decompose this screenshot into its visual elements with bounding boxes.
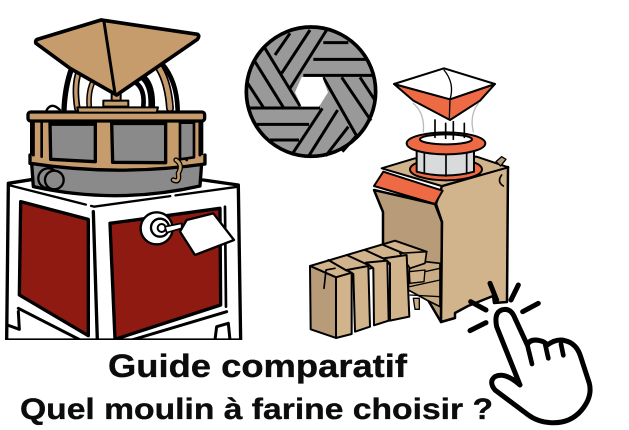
top rim — [28, 112, 205, 121]
box 2 — [347, 266, 370, 332]
hand — [492, 309, 590, 423]
illustration: stone mill on white stand — [7, 20, 241, 347]
cabinet top — [382, 157, 508, 186]
cylinder — [417, 148, 474, 175]
small drawer — [400, 252, 427, 268]
mill body — [28, 20, 205, 196]
sack lines and pins — [413, 103, 478, 132]
box tops — [310, 241, 427, 277]
gray windows — [50, 123, 95, 162]
title line 2: Quel moulin à farine choisir ? — [20, 393, 493, 426]
title line 1: Guide comparatif — [108, 348, 407, 384]
arches behind hopper — [47, 63, 178, 110]
lower orange ring — [410, 158, 482, 180]
mill top section — [374, 68, 508, 204]
gray base — [32, 163, 202, 196]
trays and boxes — [310, 241, 440, 338]
click rays — [470, 283, 538, 331]
hook — [173, 160, 180, 181]
stand with red panels — [7, 179, 241, 347]
orange panel — [374, 172, 443, 204]
illustration: electric mill with boxes — [310, 68, 508, 338]
upper orange ring — [407, 132, 485, 154]
trays — [408, 260, 440, 307]
hopper — [394, 84, 495, 120]
handle wheel and white plate — [141, 212, 234, 255]
cabinet right face — [436, 167, 508, 322]
box 4 — [383, 255, 409, 321]
hopper — [36, 20, 199, 95]
box 3 — [366, 261, 389, 325]
icon: pointing hand with click rays — [470, 283, 590, 423]
icon: iris / shutter logo — [246, 27, 376, 157]
box 1 — [310, 266, 336, 338]
knob on base — [38, 168, 58, 188]
cabinet left face — [374, 190, 442, 322]
tan ring — [30, 122, 204, 155]
